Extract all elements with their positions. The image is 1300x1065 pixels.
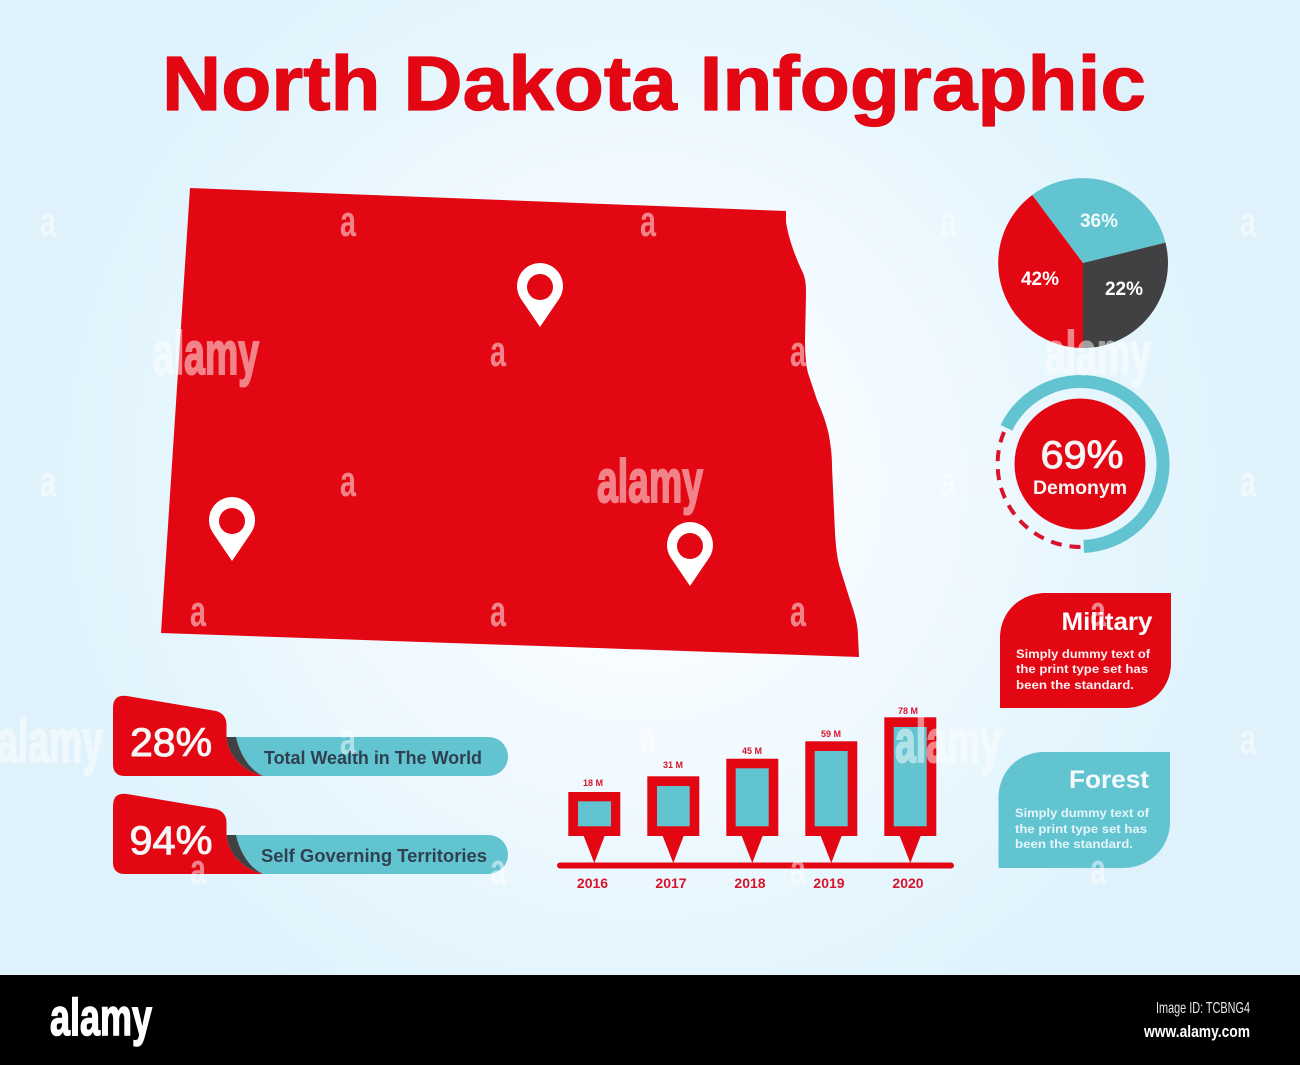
watermark: a: [490, 327, 506, 376]
watermark: alamy: [0, 708, 103, 775]
icon: map pin south-west: [209, 497, 255, 561]
bar 2019: [805, 729, 857, 891]
watermark: a: [1240, 197, 1256, 246]
watermark: a: [1240, 715, 1256, 764]
stat: 94% Self Governing Territories: 94%: [130, 819, 212, 863]
progress ring: 69% Demonym: Demonym: [1033, 478, 1127, 499]
stat: 94% Self Governing Territories: Self Governing Territories: [261, 846, 487, 866]
progress ring: 69% Demonym: [998, 381, 1163, 547]
title: North Dakota Infographic: [162, 41, 1146, 127]
watermark: a: [640, 715, 656, 764]
watermark: a: [790, 327, 806, 376]
stat: 94% Self Governing Territories: [113, 794, 508, 874]
panel: Military: [1000, 593, 1171, 708]
panel: Military: Simply dummy text of: [1016, 647, 1151, 661]
bar 2017: [647, 760, 699, 891]
watermark: a: [940, 197, 956, 246]
watermark: alamy: [895, 708, 1001, 775]
progress ring: 69% Demonym: 69%: [1040, 434, 1124, 477]
stat: 28% Total Wealth in The World: Total Wealth in The World: [264, 748, 482, 768]
bar 2016: 2016: [577, 875, 608, 891]
watermark: a: [640, 197, 656, 246]
panel: Forest: Simply dummy text of: [1015, 806, 1150, 820]
bar 2018: 45 M: [742, 746, 762, 756]
bar 2016: 18 M: [583, 778, 603, 788]
icon: map pin north: [517, 263, 563, 327]
watermark: a: [340, 457, 356, 506]
watermark: a: [940, 457, 956, 506]
watermark: alamy: [153, 320, 259, 387]
watermark: alamy: [1045, 320, 1151, 387]
bar 2019: 59 M: [821, 729, 841, 739]
panel: Military: been the standard.: [1016, 678, 1134, 692]
icon: map pin south-east: [667, 522, 713, 586]
watermark: a: [1090, 587, 1106, 636]
watermark: a: [340, 197, 356, 246]
bar 2020: 78 M: [898, 706, 918, 716]
watermark: alamy: [597, 448, 703, 515]
watermark: a: [190, 845, 206, 894]
bar 2016: [568, 778, 620, 891]
panel: Forest: Forest: [1069, 766, 1150, 794]
stat: 28% Total Wealth in The World: 28%: [130, 721, 212, 765]
panel: Military: Military: [1062, 608, 1153, 636]
watermark: a: [340, 715, 356, 764]
watermark: a: [490, 845, 506, 894]
bar 2020: [884, 706, 936, 891]
panel: Military: the print type set has: [1016, 662, 1148, 676]
watermark: [0, 197, 1256, 894]
panel: Forest: [998, 752, 1170, 868]
bar 2017: 2017: [655, 875, 687, 891]
bar 2017: 31 M: [663, 760, 683, 770]
footer url: www.alamy.com: [1143, 1022, 1250, 1041]
bar 2019: 2019: [813, 875, 845, 891]
watermark: a: [490, 587, 506, 636]
watermark: a: [790, 845, 806, 894]
baseline: [557, 862, 954, 868]
watermark: a: [190, 587, 206, 636]
watermark: a: [40, 197, 56, 246]
footer bar: [0, 975, 1300, 1065]
bar 2018: 2018: [734, 875, 766, 891]
footer logo: alamy: [50, 989, 152, 1047]
bar 2018: [726, 746, 778, 891]
pie chart: 36%: [1080, 211, 1118, 232]
bar chart: 2016 to 2020: [557, 706, 954, 891]
map: North Dakota: [161, 188, 859, 657]
footer image id: Image ID: TCBNG4: [1156, 1000, 1250, 1017]
watermark: a: [1090, 845, 1106, 894]
panel: Forest: been the standard.: [1015, 837, 1133, 851]
panel: Forest: the print type set has: [1015, 822, 1147, 836]
pie chart: 42%: [1021, 269, 1059, 290]
watermark: a: [40, 457, 56, 506]
bar 2020: 2020: [892, 875, 924, 891]
watermark: a: [790, 587, 806, 636]
watermark: a: [1240, 457, 1256, 506]
pie chart: [998, 178, 1168, 348]
stat: 28% Total Wealth in The World: [113, 696, 508, 776]
pie chart: 22%: [1105, 279, 1143, 300]
